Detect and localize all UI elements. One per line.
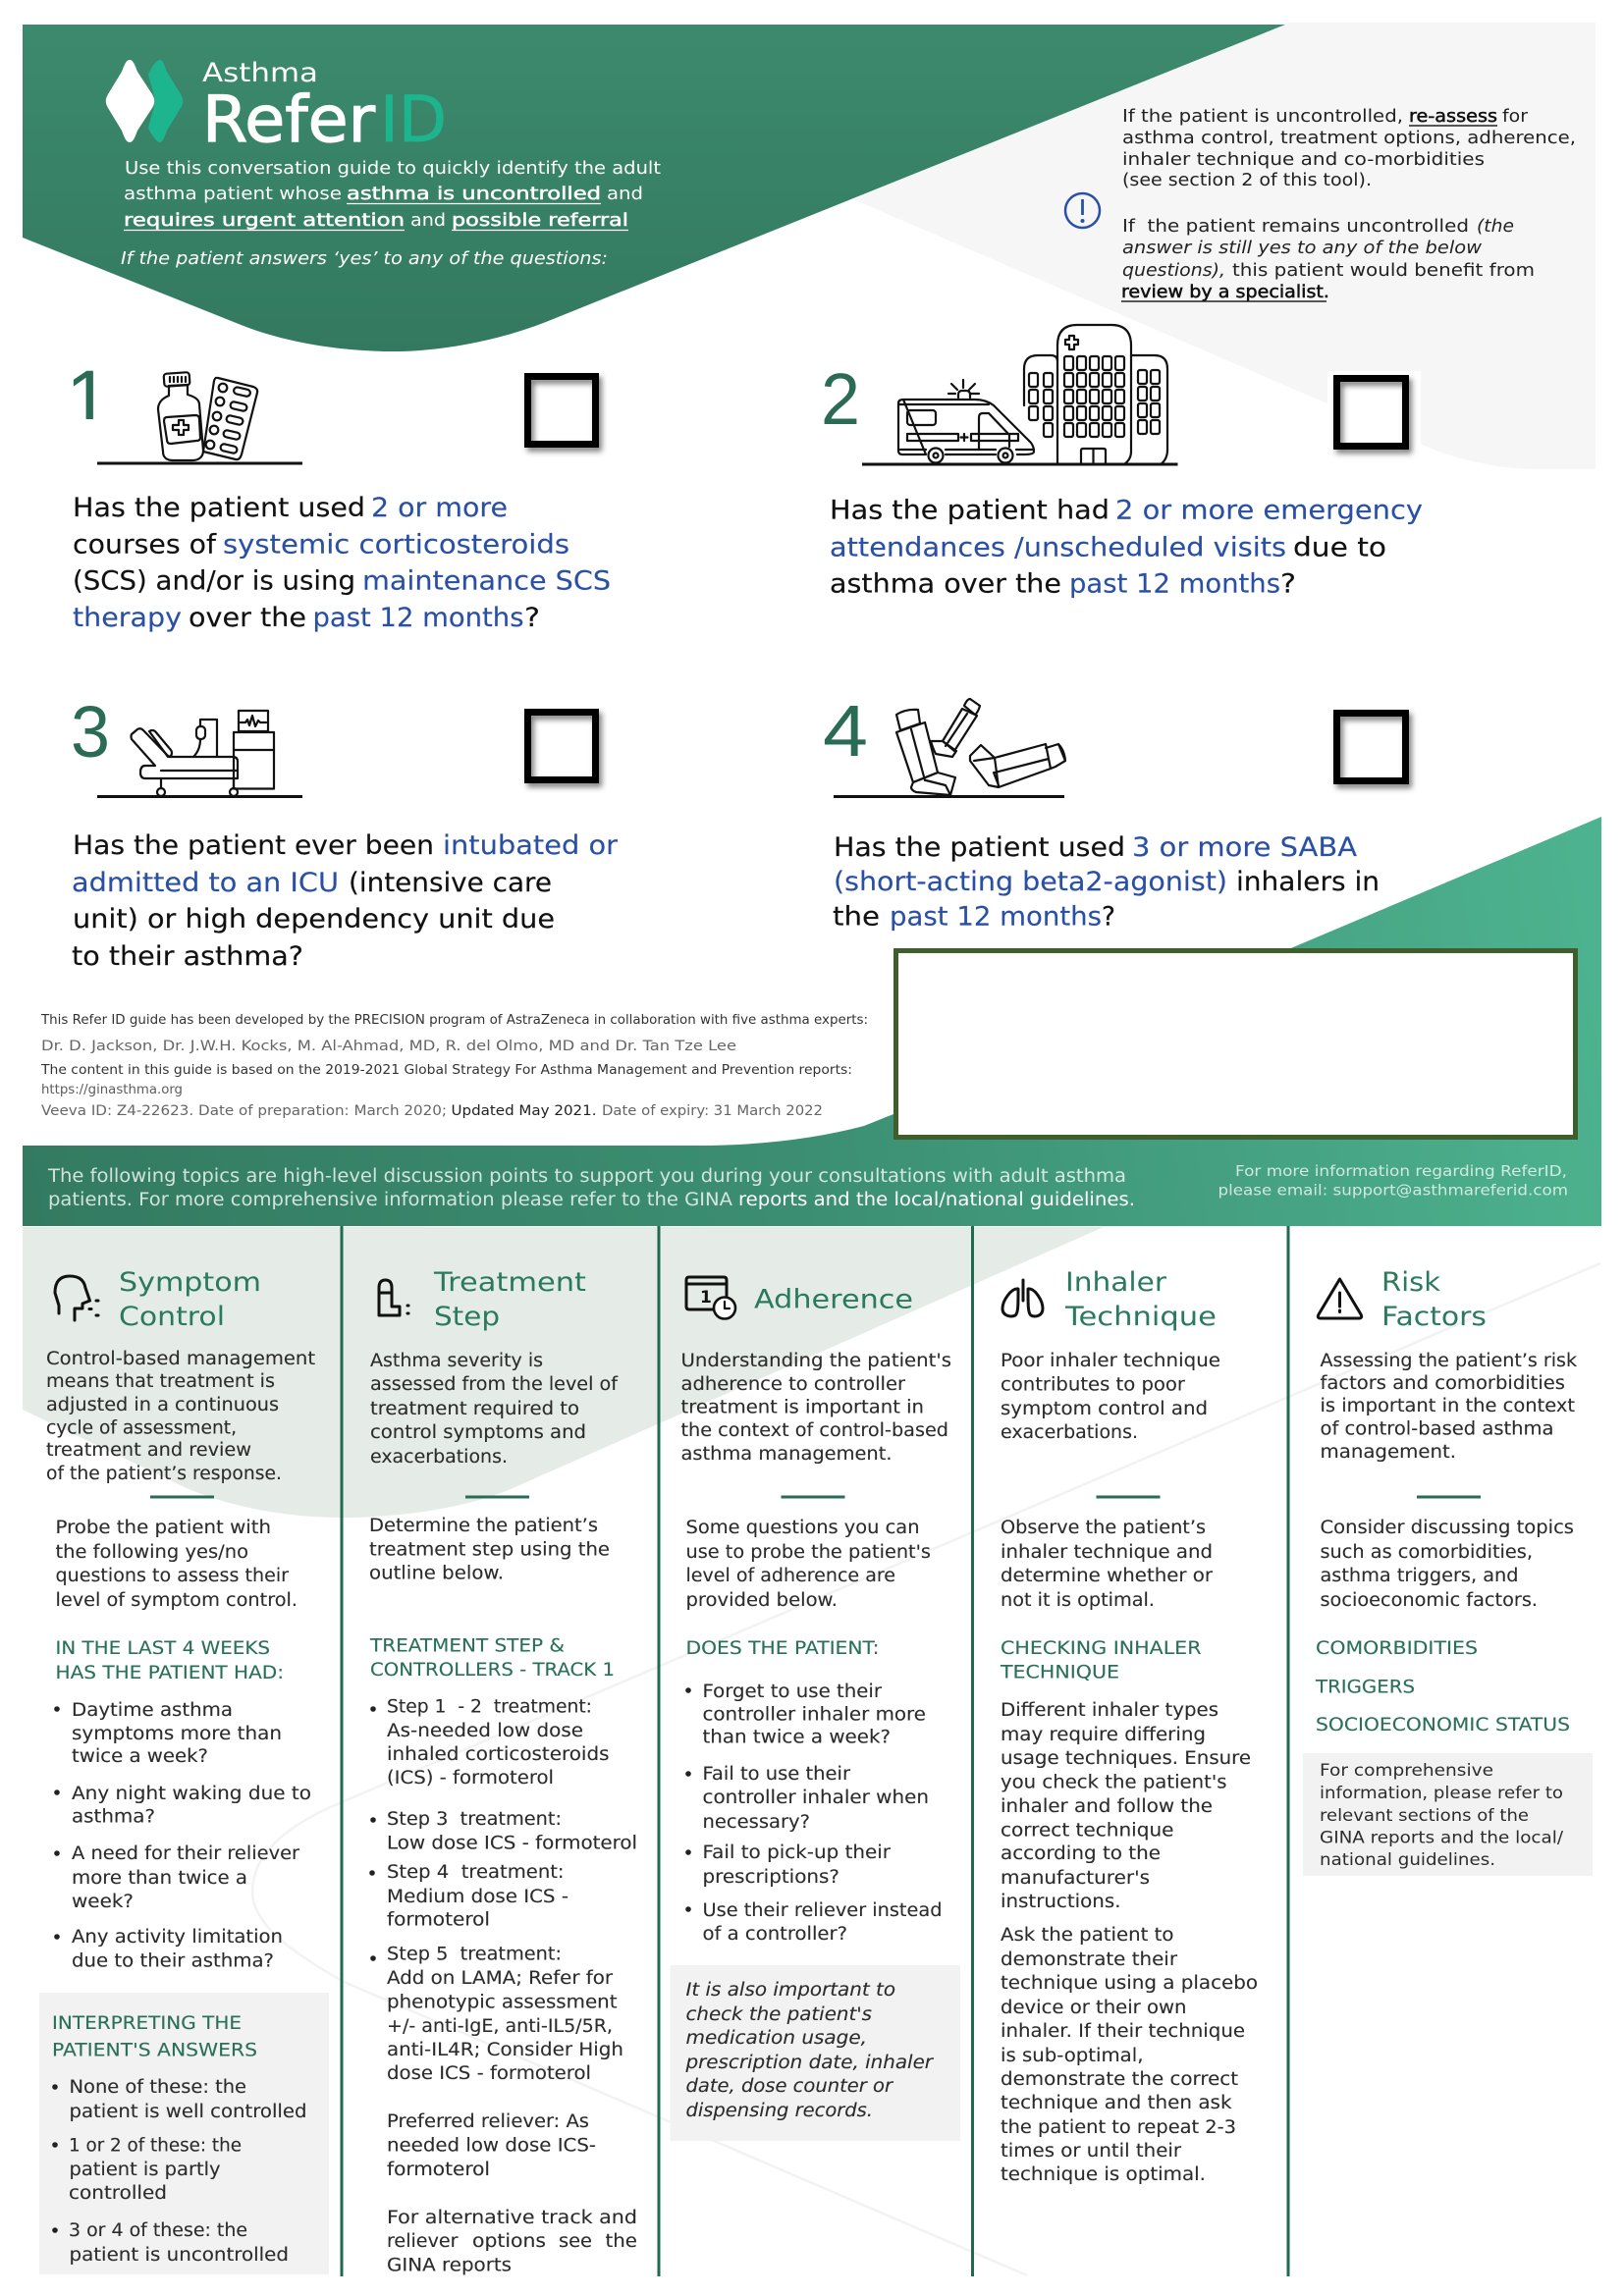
grey panel: comprehensive information: national guidelines. (1320, 1850, 1495, 1870)
preferred reliever note: needed low dose ICS- (387, 2136, 596, 2156)
observe paragraph: Observe the patient’s (1001, 1518, 1206, 1538)
symptom question list: symptoms more than (72, 1724, 282, 1744)
treatment step list: Medium dose ICS - (387, 1887, 568, 1907)
heading: Risk (1381, 1267, 1440, 1298)
grey panel: also important (670, 1965, 960, 2141)
adherence question list: controller inhaler more (703, 1704, 926, 1726)
adherence question list: prescriptions? (703, 1867, 839, 1888)
symptom question list (54, 1700, 311, 1971)
demonstration paragraph: demonstrate their (1001, 1949, 1177, 1970)
symptom question list: asthma? (72, 1806, 155, 1828)
banner text: discussion points: The following topics are high-level discussion points to support you during your consultations with adult asthma (47, 1166, 1126, 1187)
header intro text: asthma patient whose (124, 185, 342, 204)
question 4 text: ? (1102, 901, 1115, 933)
intro paragraph: asthma management. (681, 1444, 892, 1465)
callout text: asthma control, treatment options, adherence, (1122, 129, 1576, 148)
heading: Adherence (754, 1284, 913, 1315)
question 3 text: (intensive care (349, 868, 552, 898)
technique paragraph: may require differing (1001, 1725, 1206, 1745)
heading: Treatment (433, 1267, 586, 1298)
intro paragraph: of the patient’s response. (46, 1464, 282, 1484)
intro paragraph (1320, 1351, 1577, 1463)
subheading: CHECKING INHALER (1001, 1638, 1202, 1659)
demonstration paragraph: times or until their (1001, 2141, 1181, 2162)
determine paragraph: treatment step using the (369, 1539, 610, 1561)
question 3 text: unit) or high dependency unit due (73, 904, 555, 934)
callout text (1121, 107, 1576, 302)
treatment step list: Add on LAMA; Refer for (387, 1968, 613, 1989)
demonstration paragraph (1001, 1925, 1258, 2185)
treatment step list: +/- anti-IgE, anti-IL5/5R, (387, 2016, 613, 2037)
header intro text: possible referral (452, 211, 628, 231)
treatment step list: anti-IL4R; Consider High (387, 2040, 623, 2060)
decorative pale line (252, 1263, 1600, 2275)
alternative track note: see (559, 2231, 592, 2252)
rule (1096, 1496, 1161, 1498)
subheadings: SOCIOECONOMIC STATUS (1316, 1715, 1570, 1735)
footnote credits: The content in this guide is based on the 2019-2021 Global Strategy For Asthma Management and Prevention reports: (40, 1062, 852, 1078)
adherence question list: Fail to pick-up their (703, 1842, 891, 1863)
intro paragraph: control symptoms and (370, 1422, 586, 1443)
callout text: answer is still yes to any of the below (1122, 239, 1483, 258)
grey panel: interpreting answers: INTERPRETING THE (52, 2013, 242, 2034)
question 3 text: to their asthma? (72, 941, 303, 972)
grey panel: comprehensive information: information, please refer to (1320, 1784, 1563, 1803)
subheading (1000, 1638, 1202, 1682)
grey panel: also important: It is also important to (685, 1980, 895, 2001)
question 4 text: Has the patient used (834, 832, 1125, 863)
question 1 text: Has the patient used (73, 493, 365, 523)
footnote credits: https://ginasthma.org (41, 1082, 183, 1097)
subheadings (1315, 1638, 1570, 1735)
question 4 (823, 690, 1406, 933)
callout text: (see section 2 of this tool). (1122, 171, 1372, 190)
symptom question list: week? (72, 1892, 134, 1912)
callout text: questions), (1122, 261, 1225, 281)
heading: Factors (1381, 1302, 1487, 1332)
determine paragraph: outline below. (369, 1563, 504, 1584)
consider paragraph: socioeconomic factors. (1320, 1590, 1538, 1611)
question 1 text: maintenance SCS (362, 565, 611, 597)
column: inhaler technique (1000, 1267, 1258, 2185)
question 2 text (830, 495, 1423, 599)
demonstration paragraph: Ask the patient to (1001, 1925, 1174, 1946)
probe paragraph (685, 1518, 931, 1611)
question 1 text: courses of (73, 530, 218, 560)
grey panel: interpreting answers: PATIENT'S ANSWERS (52, 2040, 257, 2061)
question 2 text: attendances /unscheduled visits (830, 532, 1286, 563)
question 1 (66, 354, 611, 633)
question 4 text: 3 or more SABA (1132, 832, 1358, 863)
question 2 text: due to (1293, 532, 1386, 563)
determine paragraph: Determine the patient’s (369, 1516, 598, 1536)
demonstration paragraph: technique and then ask (1001, 2093, 1232, 2113)
symptom question list: more than twice a (72, 1868, 247, 1889)
grey panel: comprehensive information: For comprehensive (1320, 1761, 1493, 1781)
treatment step list: Step 5 treatment: (387, 1944, 562, 1965)
banner text: contact (1218, 1162, 1568, 1200)
technique paragraph: Different inhaler types (1001, 1700, 1218, 1721)
question 4 text: inhalers in (1236, 867, 1380, 897)
subheadings: COMORBIDITIES (1316, 1638, 1478, 1659)
column: treatment step (369, 1267, 637, 2275)
number 2: 2 (821, 358, 860, 440)
question 1 text: past 12 months (312, 603, 524, 633)
grey background shape: top right (853, 23, 1596, 469)
demonstration paragraph: the patient to repeat 2-3 (1001, 2117, 1236, 2138)
green header banner (23, 25, 1285, 351)
subheading: HAS THE PATIENT HAD: (55, 1663, 284, 1683)
grey panel: interpreting answers: None of these: the (69, 2077, 246, 2098)
subheading (55, 1638, 284, 1683)
header intro text (124, 159, 661, 231)
intro paragraph: of control-based asthma (1320, 1419, 1553, 1439)
probe paragraph: Probe the patient with (55, 1518, 271, 1538)
demonstration paragraph: technique is optimal. (1001, 2164, 1206, 2185)
icon: white diamond (106, 60, 154, 142)
grey panel: also important: dispensing records. (685, 2101, 873, 2121)
treatment step list: As-needed low dose (387, 1721, 583, 1741)
adherence question list (685, 1682, 943, 1945)
column dividers (342, 1226, 1288, 2276)
subheading (369, 1635, 615, 1681)
intro paragraph: adjusted in a continuous (46, 1395, 279, 1415)
subheadings: TRIGGERS (1315, 1677, 1415, 1698)
banner text: contact: For more information regarding ReferID, (1235, 1162, 1567, 1180)
demonstration paragraph: technique using a placebo (1001, 1973, 1258, 1994)
symptom question list: due to their asthma? (72, 1951, 274, 1971)
question 2 (821, 325, 1423, 599)
treatment step list: Step 4 treatment: (387, 1862, 564, 1883)
grey panel: interpreting answers: 1 or 2 of these: the (69, 2136, 242, 2156)
footnote credits: This Refer ID guide has been developed by the PRECISION program of AstraZeneca in collaboration with five asthma experts: (40, 1012, 868, 1028)
icon: bottle and blister pack (97, 372, 302, 463)
icon: inhalers (834, 699, 1065, 797)
heading: Symptom (119, 1267, 261, 1298)
header prompt: If the patient answers ‘yes’ to any of the questions: (121, 249, 608, 269)
checkbox 3 (528, 713, 595, 779)
heading (119, 1267, 261, 1332)
logo wordmark (202, 58, 447, 157)
preferred reliever note (387, 2111, 596, 2180)
subheading: TECHNIQUE (1000, 1663, 1119, 1682)
intro paragraph: exacerbations. (370, 1447, 508, 1468)
technique paragraph: manufacturer's (1001, 1868, 1150, 1889)
observe paragraph: not it is optimal. (1001, 1590, 1155, 1611)
question 2 text: asthma over the (830, 569, 1061, 599)
callout text: for (1502, 107, 1529, 127)
intro paragraph: Understanding the patient's (681, 1351, 951, 1371)
checkbox 4 (1337, 713, 1406, 781)
intro paragraph: adherence to controller (681, 1374, 905, 1395)
alternative track note: reliever (387, 2231, 459, 2252)
banner text: discussion points: reports and the local/national guidelines. (738, 1190, 1135, 1210)
intro paragraph: Poor inhaler technique (1001, 1351, 1220, 1371)
symptom question list: A need for their reliever (72, 1843, 299, 1864)
treatment step list: phenotypic assessment (387, 1993, 617, 2012)
header intro text: and (607, 185, 643, 204)
callout text: If the patient is uncontrolled, (1122, 107, 1403, 127)
grey panel: comprehensive information: GINA reports and the local/ (1320, 1828, 1563, 1847)
determine paragraph (369, 1516, 610, 1584)
question 3 text: intubated or (443, 830, 619, 861)
probe paragraph: level of symptom control. (55, 1590, 298, 1611)
header intro text: requires urgent attention (124, 211, 405, 231)
intro paragraph: management. (1320, 1442, 1456, 1463)
question 4 text: the (833, 901, 880, 933)
column: adherence (670, 1277, 960, 2141)
callout text: inhaler technique and co-morbidities (1122, 150, 1485, 170)
rule (465, 1496, 529, 1498)
technique paragraph: instructions. (1001, 1892, 1121, 1912)
technique paragraph: according to the (1001, 1843, 1161, 1864)
consider paragraph: such as comorbidities, (1320, 1542, 1533, 1563)
question 1 text: 2 or more (371, 493, 508, 523)
treatment step list: dose ICS - formoterol (387, 2063, 591, 2084)
footnote credits (40, 1012, 868, 1119)
intro paragraph: treatment required to (370, 1399, 579, 1419)
intro paragraph: is important in the context (1320, 1396, 1575, 1416)
grey panel: interpreting answers: patient is partly (69, 2160, 221, 2180)
logo (106, 58, 447, 157)
icon: lungs (1002, 1280, 1043, 1316)
intro paragraph (681, 1351, 951, 1465)
question 4 text: (short-acting beta2-agonist) (834, 867, 1227, 897)
probe paragraph: Some questions you can (685, 1518, 919, 1538)
logo wordmark: Asthma (202, 58, 318, 88)
green band and corner shape (23, 817, 1601, 1226)
preferred reliever note: formoterol (387, 2160, 490, 2180)
question 1 text: ? (524, 603, 540, 633)
logo wordmark: Refer (202, 83, 375, 157)
icon: calendar and clock: 1 (700, 1288, 712, 1308)
symptom question list: Daytime asthma (72, 1700, 233, 1721)
callout text: review by a specialist. (1121, 283, 1329, 302)
demonstration paragraph: inhaler. If their technique (1001, 2021, 1245, 2042)
number 1: 1 (66, 354, 111, 444)
grey panel: interpreting answers (39, 1993, 329, 2274)
white blank box (895, 950, 1575, 1137)
heading: Control (119, 1302, 225, 1332)
adherence question list: of a controller? (703, 1924, 847, 1945)
intro paragraph (370, 1351, 619, 1468)
icon: teal chevron (148, 60, 183, 142)
column: risk factors (1303, 1267, 1593, 1876)
question 3 (71, 691, 619, 972)
intro paragraph: Asthma severity is (370, 1351, 543, 1371)
rule (150, 1496, 214, 1498)
number 4: 4 (823, 690, 868, 772)
intro paragraph: factors and comorbidities (1320, 1373, 1565, 1394)
heading (1064, 1267, 1217, 1332)
demonstration paragraph: demonstrate the correct (1001, 2069, 1238, 2090)
question 3 text (72, 830, 619, 972)
intro paragraph: symptom control and (1001, 1399, 1208, 1419)
icon: inhaler (379, 1280, 408, 1315)
observe paragraph (1001, 1518, 1213, 1611)
technique paragraph: correct technique (1001, 1820, 1174, 1842)
footnote credits: Updated May 2021. (452, 1103, 597, 1119)
adherence question list: Forget to use their (703, 1682, 882, 1702)
callout text: this patient would benefit from (1232, 261, 1535, 281)
rule (1417, 1496, 1481, 1498)
technique paragraph: inhaler and follow the (1001, 1796, 1213, 1817)
technique paragraph: usage techniques. Ensure (1001, 1748, 1251, 1769)
heading: Inhaler (1065, 1267, 1167, 1298)
alternative track note: For alternative track and (387, 2208, 637, 2228)
grey panel: also important: prescription date, inhaler (684, 2053, 934, 2073)
subheading: CONTROLLERS - TRACK 1 (370, 1660, 615, 1681)
demonstration paragraph: device or their own (1001, 1998, 1186, 2018)
header intro text: asthma is uncontrolled (347, 185, 601, 204)
subheading: TREATMENT STEP & (369, 1635, 565, 1657)
grey panel: also important: medication usage, (685, 2028, 867, 2049)
adherence question list: necessary? (703, 1812, 810, 1833)
probe paragraph: use to probe the patient's (685, 1542, 931, 1563)
column: symptom control (39, 1267, 329, 2274)
question 1 text: over the (189, 603, 306, 633)
heading (433, 1267, 586, 1332)
question 1 text: (SCS) and/or is using (73, 565, 355, 597)
treatment step list: formoterol (387, 1910, 490, 1930)
treatment step list: inhaled corticosteroids (387, 1744, 609, 1765)
checkbox 2 (1337, 379, 1406, 446)
heading: Technique (1064, 1302, 1217, 1332)
probe paragraph: provided below. (685, 1590, 838, 1611)
banner text: discussion points: patients. For more comprehensive information please refer to the GINA (48, 1190, 732, 1210)
subheading: IN THE LAST 4 WEEKS (55, 1638, 270, 1659)
question 2 text: ? (1280, 569, 1296, 599)
heading (1381, 1267, 1487, 1332)
intro paragraph: Control-based management (46, 1349, 315, 1369)
footnote credits: Date of expiry: 31 March 2022 (602, 1103, 823, 1119)
heading: Step (434, 1302, 500, 1332)
probe paragraph: level of adherence are (685, 1566, 895, 1586)
consider paragraph: asthma triggers, and (1320, 1566, 1518, 1586)
treatment step list (369, 1696, 637, 2084)
alternative track note (387, 2208, 637, 2275)
intro paragraph: means that treatment is (46, 1371, 275, 1392)
treatment step list: Step 1 - 2 treatment: (387, 1696, 592, 1718)
demonstration paragraph: is sub-optimal, (1001, 2046, 1143, 2066)
grey panel: comprehensive information (1303, 1753, 1593, 1876)
logo wordmark: ID (380, 83, 447, 157)
intro paragraph: Assessing the patient’s risk (1320, 1351, 1577, 1371)
adherence question list: Use their reliever instead (703, 1900, 943, 1921)
intro paragraph: cycle of assessment, (46, 1417, 237, 1439)
symptom question list: twice a week? (72, 1746, 208, 1767)
callout text: (the (1477, 217, 1514, 237)
question 1 text (73, 493, 611, 633)
treatment step list: Low dose ICS - formoterol (387, 1834, 637, 1853)
grey panel: also important: check the patient's (685, 2004, 872, 2025)
question 4 text: past 12 months (890, 901, 1102, 933)
footnote credits: Veeva ID: Z4-22623. Date of preparation: March 2020; (41, 1103, 447, 1119)
intro paragraph: contributes to poor (1001, 1374, 1185, 1396)
rule (782, 1496, 844, 1498)
icon: warning triangle (1318, 1279, 1362, 1318)
probe paragraph: questions to assess their (55, 1566, 289, 1586)
icon: head (55, 1276, 98, 1320)
banner text: contact: please email: support@asthmareferid.com (1218, 1182, 1568, 1200)
question 2 text: 2 or more emergency (1115, 495, 1423, 526)
intro paragraph: assessed from the level of (370, 1374, 619, 1395)
preferred reliever note: Preferred reliever: As (387, 2111, 589, 2132)
question 3 text: admitted to an ICU (72, 868, 339, 898)
callout text: If the patient remains uncontrolled (1122, 217, 1469, 237)
intro paragraph: the context of control-based (681, 1420, 948, 1441)
grey panel: interpreting answers: patient is well controlled (69, 2102, 306, 2122)
callout text: re-assess (1409, 107, 1497, 127)
white patch behind checkbox 2 (1327, 371, 1421, 459)
intro paragraph (46, 1349, 315, 1484)
technique paragraph: you check the patient's (1001, 1773, 1227, 1792)
symptom question list: Any activity limitation (72, 1927, 283, 1948)
question 2 text: past 12 months (1069, 569, 1280, 599)
treatment step list: Step 3 treatment: (387, 1809, 562, 1830)
question 2 text: Has the patient had (830, 495, 1110, 526)
alternative track note: options (472, 2231, 546, 2252)
probe paragraph: the following yes/no (55, 1542, 248, 1563)
pale green background shape: columns (23, 1227, 1104, 1518)
grey panel: interpreting answers: 3 or 4 of these: the (69, 2220, 247, 2241)
adherence question list: than twice a week? (703, 1728, 891, 1747)
grey panel: comprehensive information: relevant sections of the (1320, 1806, 1529, 1826)
icon: exclamation (1065, 193, 1100, 228)
subheading: DOES THE PATIENT: (685, 1638, 880, 1659)
question 4 text (833, 832, 1380, 933)
treatment step list: (ICS) - formoterol (387, 1768, 554, 1789)
consider paragraph: Consider discussing topics (1320, 1518, 1574, 1538)
header intro text: and (410, 211, 446, 231)
question 1 text: therapy (73, 603, 182, 633)
intro paragraph: treatment is important in (681, 1398, 924, 1417)
probe paragraph (55, 1518, 298, 1611)
observe paragraph: inhaler technique and (1001, 1542, 1213, 1563)
alternative track note: GINA reports (387, 2256, 512, 2275)
question 3 text: Has the patient ever been (73, 830, 434, 861)
grey panel: interpreting answers: controlled (69, 2183, 167, 2204)
icon: calendar and clock (686, 1277, 735, 1319)
technique paragraph (1001, 1700, 1251, 1912)
icon: ambulance and hospital (862, 325, 1178, 464)
consider paragraph (1320, 1518, 1574, 1611)
intro paragraph: exacerbations. (1001, 1422, 1138, 1443)
intro paragraph (1001, 1351, 1220, 1443)
alternative track note: the (605, 2231, 637, 2252)
footnote credits: Dr. D. Jackson, Dr. J.W.H. Kocks, M. Al-Ahmad, MD, R. del Olmo, MD and Dr. Tan Tze Lee (41, 1039, 736, 1054)
banner text: discussion points (47, 1166, 1135, 1210)
symptom question list: Any night waking due to (72, 1784, 311, 1804)
grey panel: interpreting answers: patient is uncontrolled (69, 2245, 289, 2266)
header intro text: Use this conversation guide to quickly identify the adult (125, 159, 661, 179)
checkbox 1 (528, 377, 595, 444)
intro paragraph: treatment and review (46, 1440, 251, 1461)
observe paragraph: determine whether or (1001, 1566, 1213, 1586)
adherence question list: Fail to use their (703, 1764, 850, 1785)
grey panel: also important: date, dose counter or (685, 2076, 893, 2097)
number 3: 3 (71, 691, 110, 773)
icon: hospital bed (97, 711, 302, 797)
adherence question list: controller inhaler when (703, 1788, 929, 1808)
question 1 text: systemic corticosteroids (223, 530, 569, 560)
